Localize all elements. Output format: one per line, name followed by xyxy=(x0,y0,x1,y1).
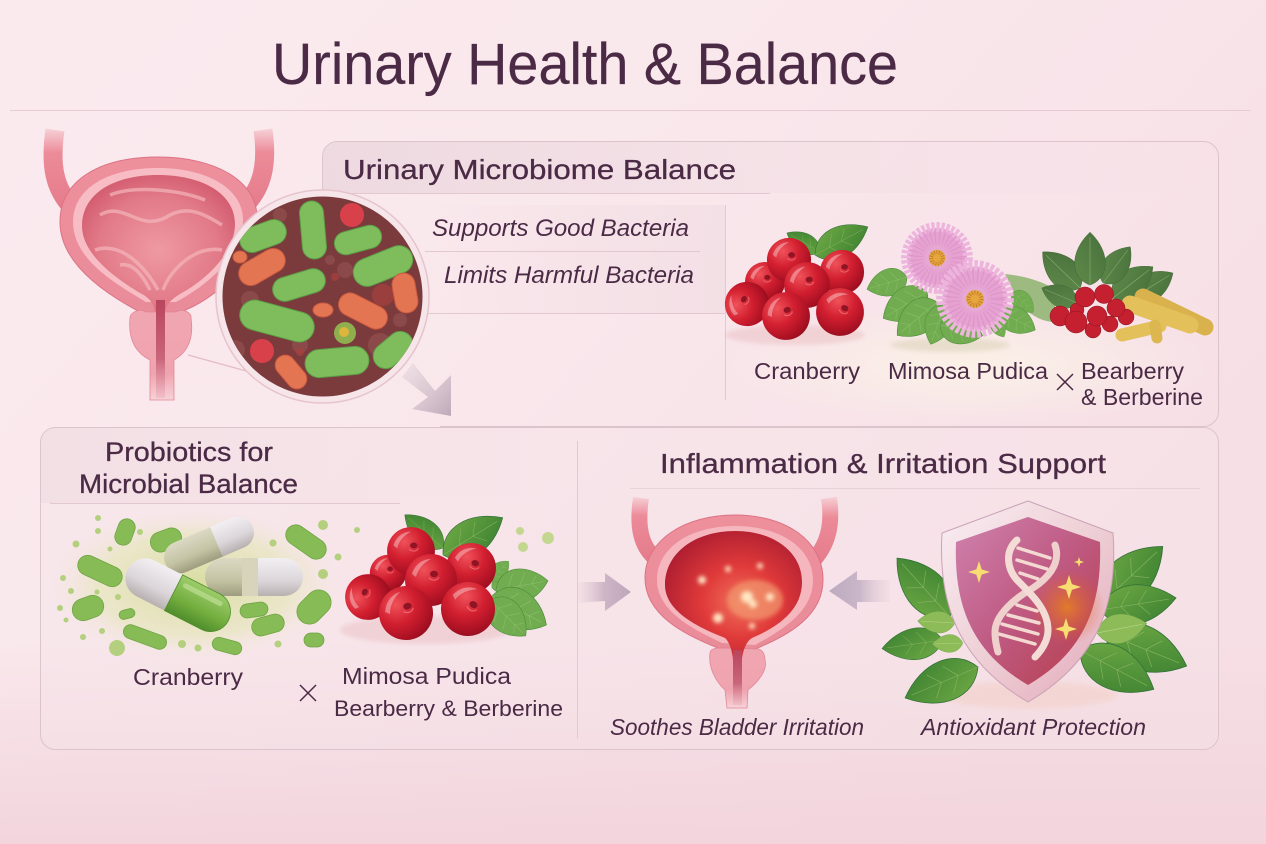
text: limits harmful bacteria: Limits Harmful Bacteria xyxy=(444,262,694,289)
illustration: inflamed bladder xyxy=(639,498,830,708)
illustration: cranberry cluster lower xyxy=(337,502,556,647)
sparkle stars xyxy=(968,557,1084,640)
label: mimosa pudica bearberry berberine lower: Mimosa Pudica xyxy=(342,663,511,689)
text: supports good bacteria: Supports Good Bacteria xyxy=(432,215,689,242)
caption: soothes bladder irritation: Soothes Bladder Irritation xyxy=(610,714,864,740)
caption: antioxidant protection: Antioxidant Protection xyxy=(919,714,1146,740)
title: Urinary Health & Balance xyxy=(272,32,898,97)
heading: probiotics for microbial balance: Microbial Balance xyxy=(79,469,298,499)
flower upper xyxy=(906,227,968,289)
illustration: magnified bacteria circle xyxy=(216,190,429,403)
panel: urinary microbiome balance xyxy=(322,142,1218,426)
heading: probiotics for microbial balance xyxy=(79,437,298,499)
label: cranberry lower: Cranberry xyxy=(133,664,244,690)
red bacteria xyxy=(233,244,420,393)
heading: inflammation and irritation support: Inflammation & Irritation Support xyxy=(660,448,1106,479)
arrow: probiotics to bladder xyxy=(577,573,631,611)
label: mimosa pudica bearberry berberine lower: Bearberry & Berberine xyxy=(334,696,563,721)
green bacteria xyxy=(236,200,418,379)
heading: urinary microbiome balance: Urinary Microbiome Balance xyxy=(343,154,736,185)
label: bearberry and berberine top xyxy=(1081,358,1203,410)
illustration: bladder anatomy xyxy=(53,130,265,400)
heading: probiotics for microbial balance: Probiotics for xyxy=(105,437,273,467)
dna helix xyxy=(995,540,1057,657)
label: mimosa pudica top: Mimosa Pudica xyxy=(888,358,1048,384)
label: bearberry and berberine top: Bearberry xyxy=(1081,358,1185,384)
flower lower xyxy=(941,265,1009,333)
illustration: bearberry and berberine xyxy=(1032,232,1205,338)
capsule back right xyxy=(205,558,303,596)
symbol: times lower xyxy=(300,685,316,701)
capsule front xyxy=(119,552,237,638)
illustration: probiotic capsules xyxy=(45,507,360,663)
panel: lower combined xyxy=(40,428,1218,750)
symbol: times top xyxy=(1057,374,1073,390)
capsule back left xyxy=(159,512,259,578)
label: cranberry top: Cranberry xyxy=(754,358,861,384)
label: mimosa pudica bearberry berberine lower xyxy=(334,663,563,721)
arrow: bacteria to probiotics xyxy=(402,363,451,416)
illustration: cranberry cluster top xyxy=(717,213,875,345)
illustration: mimosa pudica flowers xyxy=(863,227,1055,352)
label: bearberry and berberine top: & Berberine xyxy=(1081,384,1203,410)
illustration: antioxidant shield with leaves xyxy=(880,501,1195,717)
arrow: shield to bladder xyxy=(829,571,890,610)
shield xyxy=(941,501,1114,702)
